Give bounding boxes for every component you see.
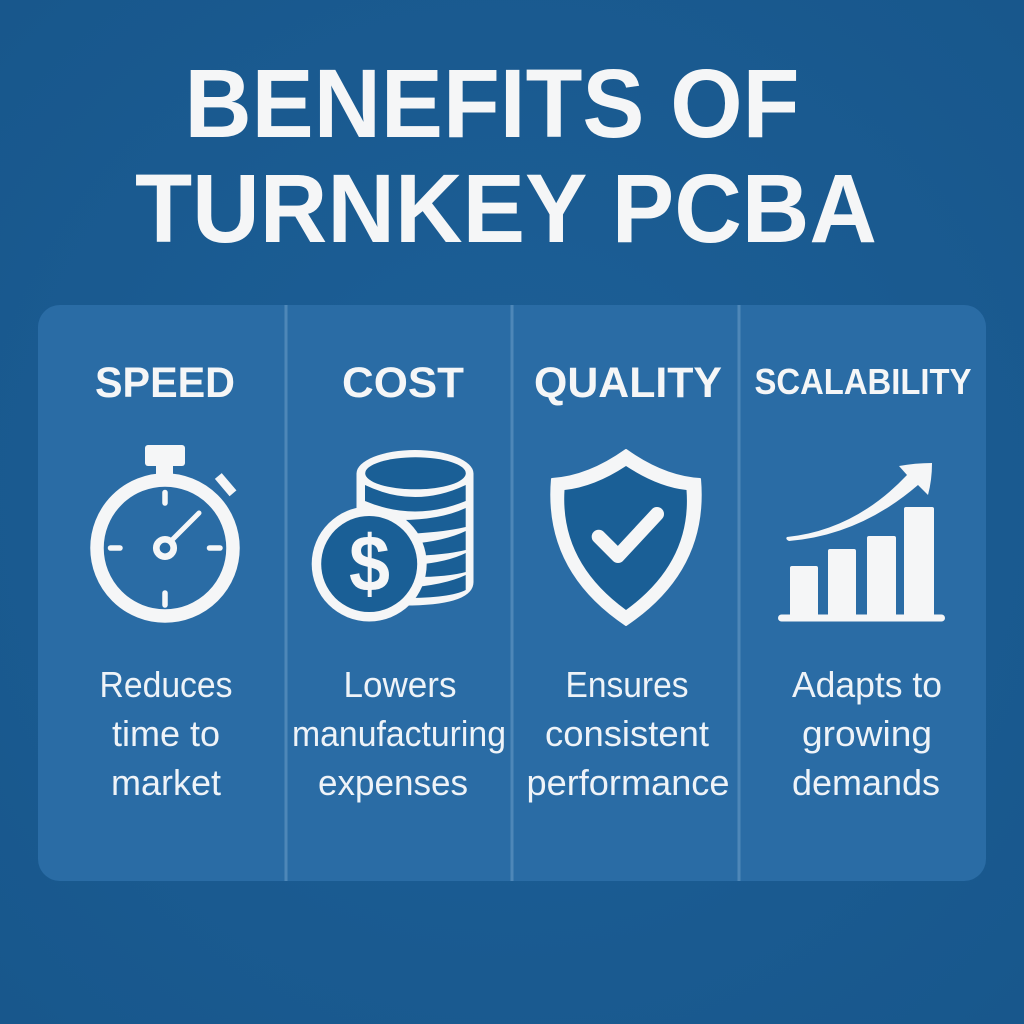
icon: shield [551, 450, 701, 625]
column: cost [292, 359, 506, 803]
panel: benefits table [38, 305, 986, 881]
heading: scalability: SCALABILITY [754, 361, 972, 402]
body text: cost: Lowers [344, 664, 456, 705]
title: TURNKEY PCBA [135, 154, 877, 263]
body text: speed [100, 664, 232, 803]
body text: quality [526, 664, 730, 803]
body text: speed: time to [112, 713, 220, 754]
body text: speed: market [111, 762, 221, 803]
icon: coins [312, 450, 474, 622]
body text: quality: performance [526, 762, 730, 803]
column: scalability [754, 361, 972, 803]
heading: cost: COST [342, 359, 464, 407]
column: speed [95, 359, 235, 803]
icon: growth chart [778, 463, 945, 622]
title [135, 49, 877, 263]
icon: coins: $ [349, 519, 390, 608]
body text: cost [292, 664, 506, 803]
title: BENEFITS OF [184, 49, 800, 158]
column: quality [526, 359, 730, 803]
heading: speed: SPEED [95, 359, 235, 407]
body text: scalability: demands [792, 762, 940, 803]
body text: scalability [792, 664, 942, 803]
body text: speed: Reduces [100, 664, 232, 705]
icon: stopwatch [97, 445, 233, 616]
body text: quality: Ensures [566, 664, 688, 705]
heading: quality: QUALITY [534, 359, 722, 407]
body text: cost: expenses [318, 762, 468, 803]
body text: scalability: growing [802, 713, 932, 754]
body text: cost: manufacturing [292, 713, 506, 754]
body text: scalability: Adapts to [792, 664, 942, 705]
body text: quality: consistent [545, 713, 709, 754]
